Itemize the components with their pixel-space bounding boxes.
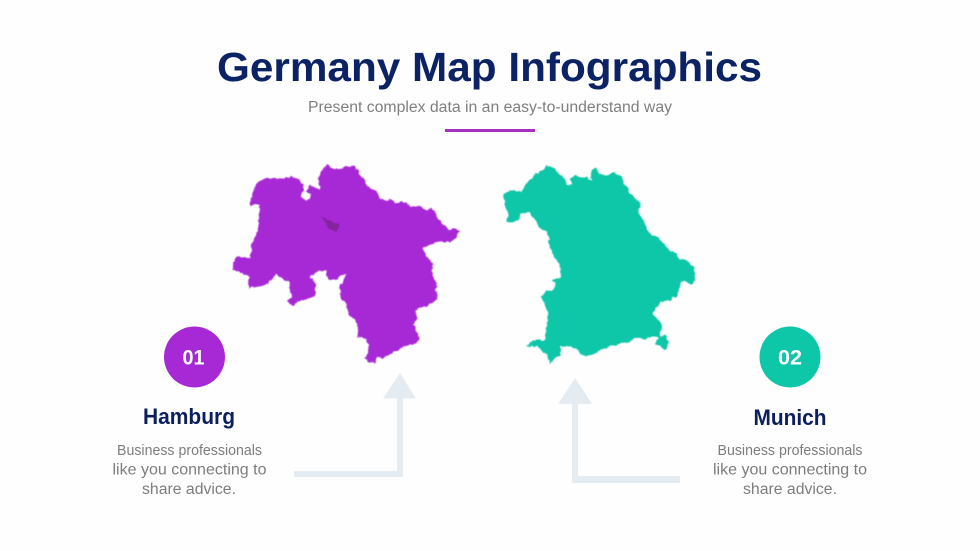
description: Munich: like you connecting to	[713, 462, 867, 478]
heading: Munich: Munich	[754, 405, 826, 430]
title: Germany Map Infographics	[217, 44, 762, 90]
description: Hamburg: share advice.	[142, 481, 236, 498]
description: Hamburg	[112, 442, 267, 498]
number badge 01	[164, 326, 225, 388]
region marker: Bremen dark patch	[321, 216, 339, 232]
panel: Munich	[713, 326, 867, 498]
arrow: left, pointing up to Hamburg map	[294, 373, 416, 477]
number badge 01: 01	[182, 346, 205, 370]
description: Hamburg: like you connecting to	[112, 462, 267, 478]
title underline	[445, 129, 535, 132]
number badge 02: 02	[778, 346, 802, 370]
description: Munich: Business professionals	[718, 442, 862, 459]
subtitle: Present complex data in an easy-to-understand way	[308, 99, 672, 116]
map: Bavaria	[503, 165, 695, 364]
number badge 02	[760, 326, 820, 388]
map: Lower Saxony with Hamburg marker	[233, 164, 461, 363]
panel: Hamburg	[112, 326, 267, 498]
region shape: purple	[233, 164, 461, 363]
description: Munich	[713, 442, 867, 498]
description: Hamburg: Business professionals	[117, 442, 262, 459]
description: Munich: share advice.	[743, 481, 837, 498]
heading: Hamburg: Hamburg	[143, 404, 235, 429]
arrow: right, pointing up to Munich map	[558, 378, 680, 483]
